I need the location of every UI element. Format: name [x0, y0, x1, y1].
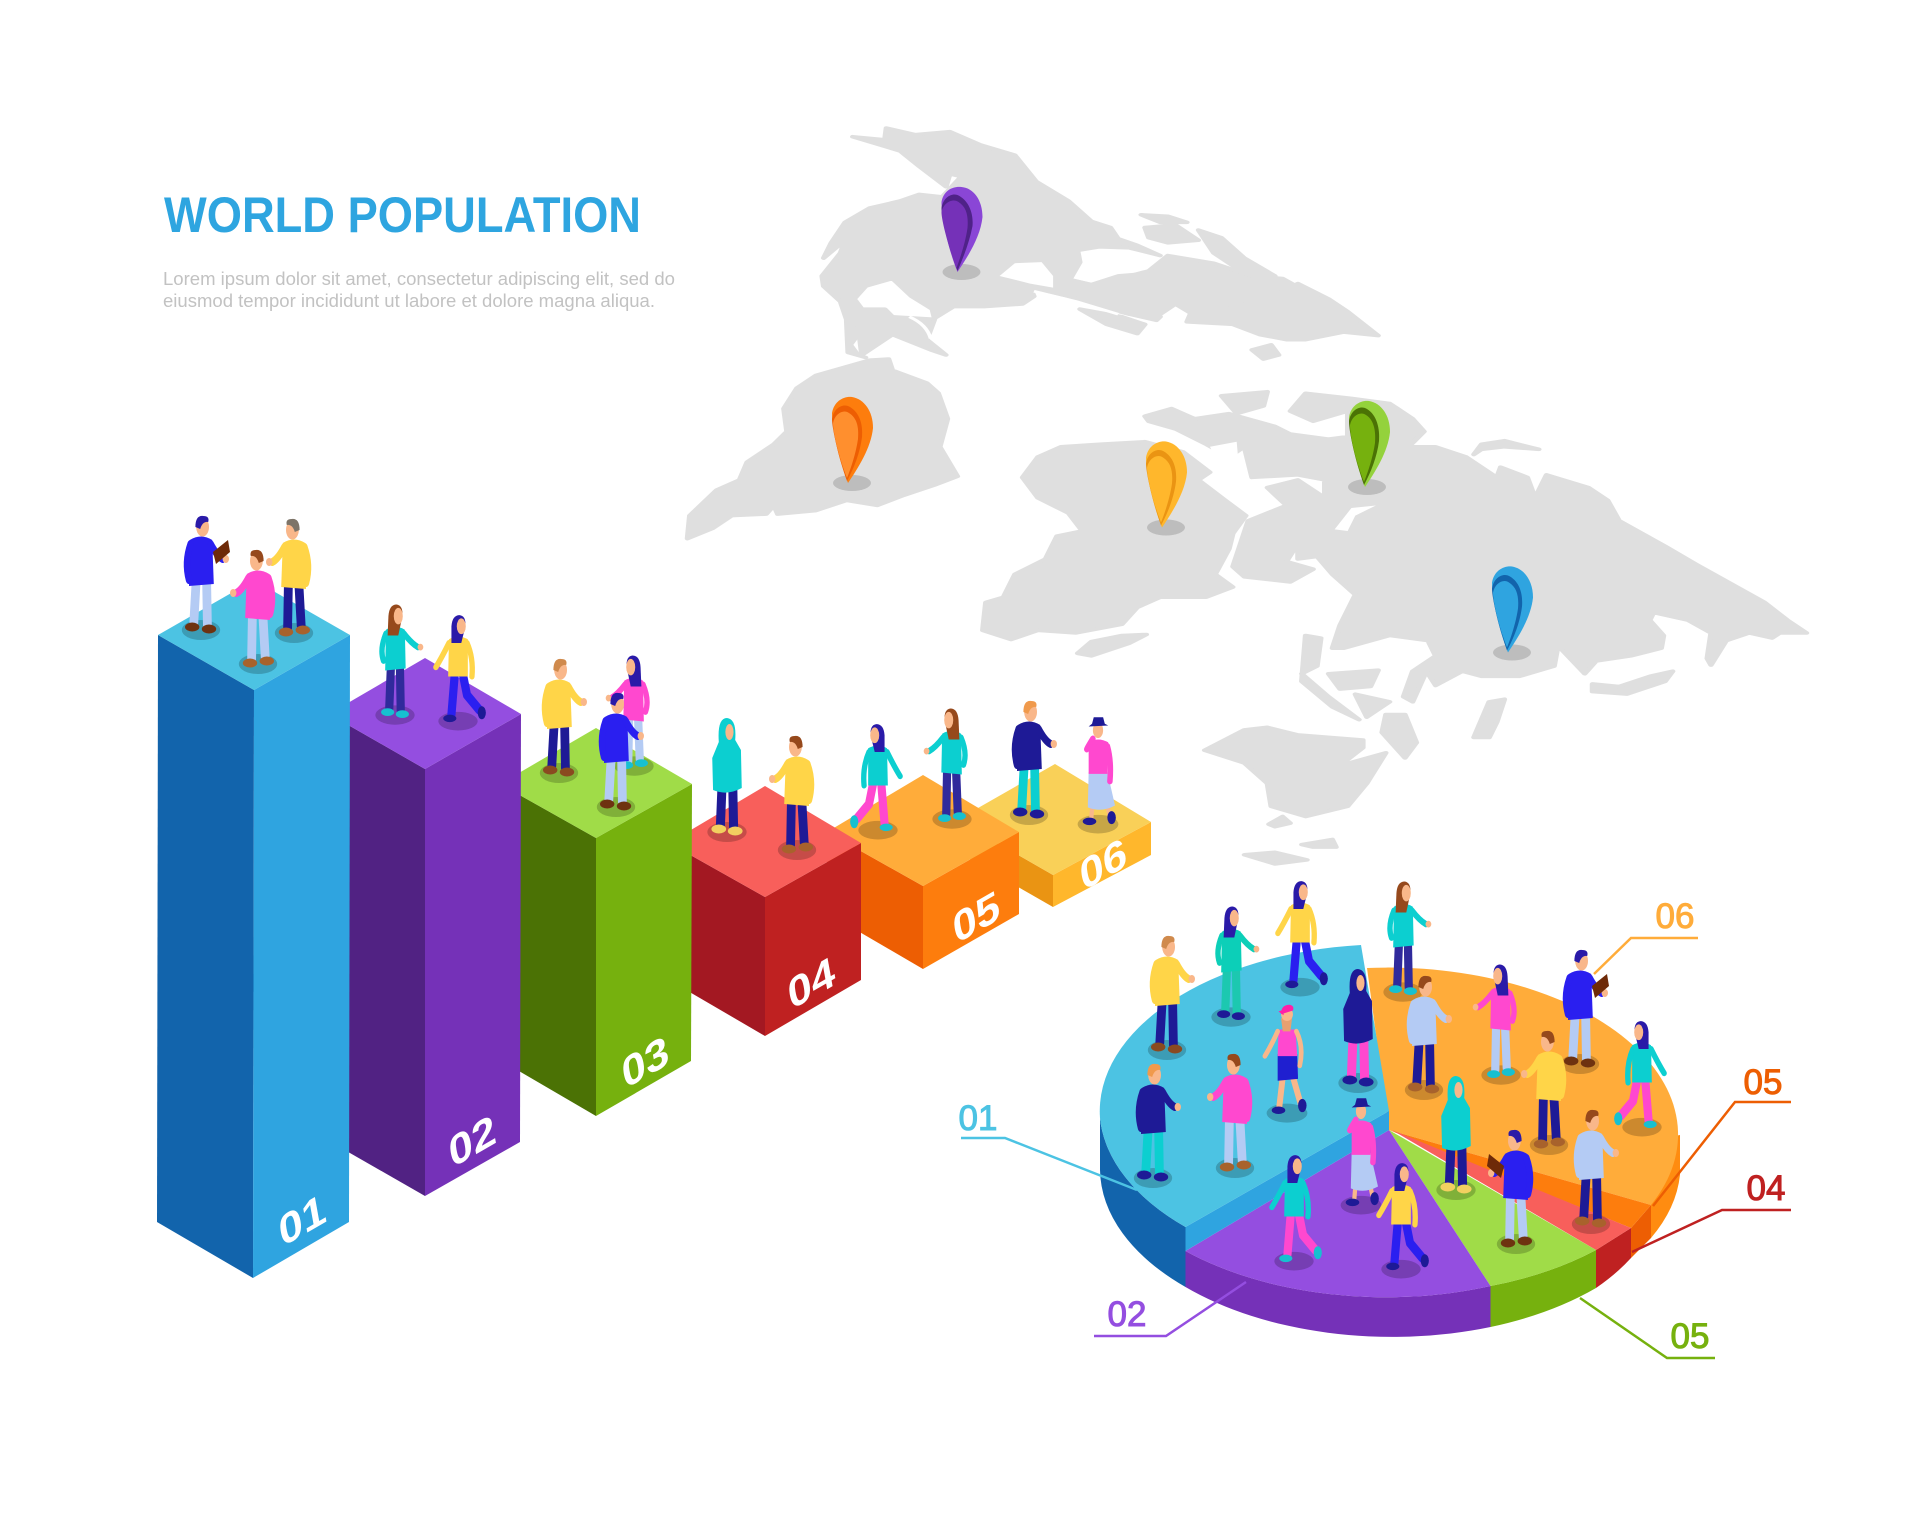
label 01: [959, 1099, 1137, 1190]
map pins: [832, 187, 1533, 660]
isometric pie chart: [1100, 945, 1680, 1337]
pin: blue: [1492, 566, 1533, 660]
bar 04: [669, 786, 861, 1036]
bar 05: 05: [949, 882, 1003, 953]
slice 06: [1367, 968, 1680, 1238]
description text: [163, 269, 675, 311]
label 05 orange: [1653, 1063, 1791, 1206]
world map: [687, 128, 1807, 864]
bar 06: 06: [1076, 829, 1130, 900]
label 06: 06: [1656, 897, 1694, 936]
label 01: 01: [959, 1099, 997, 1138]
people on bars: [182, 516, 1118, 860]
label 04: [1632, 1169, 1791, 1252]
isometric bar chart: [157, 580, 1151, 1278]
slice 04: [1392, 1130, 1631, 1288]
bar 02: 02: [445, 1106, 499, 1177]
slice 05 orange: [1389, 1130, 1651, 1258]
pin: green: [1348, 401, 1390, 495]
pie labels: [959, 897, 1791, 1358]
slice 02 purple: [1186, 1130, 1490, 1337]
bar 04: 04: [784, 948, 838, 1019]
label 06: [1594, 897, 1698, 974]
label 05 green: [1580, 1298, 1715, 1358]
bar 06: [957, 764, 1151, 907]
title: WORLD POPULATION: [164, 187, 641, 243]
description text: eiusmod tempor incididunt ut labore et dolore magna aliqua.: [163, 291, 655, 311]
slice 01 blue: [1100, 945, 1389, 1287]
label 05 green: 05: [1671, 1317, 1709, 1356]
pin: purple: [942, 187, 982, 280]
description text: Lorem ipsum dolor sit amet, consectetur adipiscing elit, sed do: [163, 269, 675, 289]
label 02: [1094, 1282, 1246, 1336]
bar 02: [329, 658, 521, 1196]
people on pie: [1134, 881, 1664, 1278]
slice 03 green: [1389, 1130, 1596, 1327]
bar 01: 01: [275, 1185, 329, 1256]
label 05 orange: 05: [1744, 1063, 1782, 1102]
pin: yellow: [1146, 441, 1187, 536]
bar 03: [500, 728, 692, 1116]
pin: orange: [832, 397, 873, 491]
bar 05: [827, 775, 1019, 969]
bar 01: [157, 580, 350, 1278]
label 02: 02: [1108, 1295, 1146, 1334]
bar 03: 03: [618, 1027, 672, 1098]
label 04: 04: [1747, 1169, 1785, 1208]
